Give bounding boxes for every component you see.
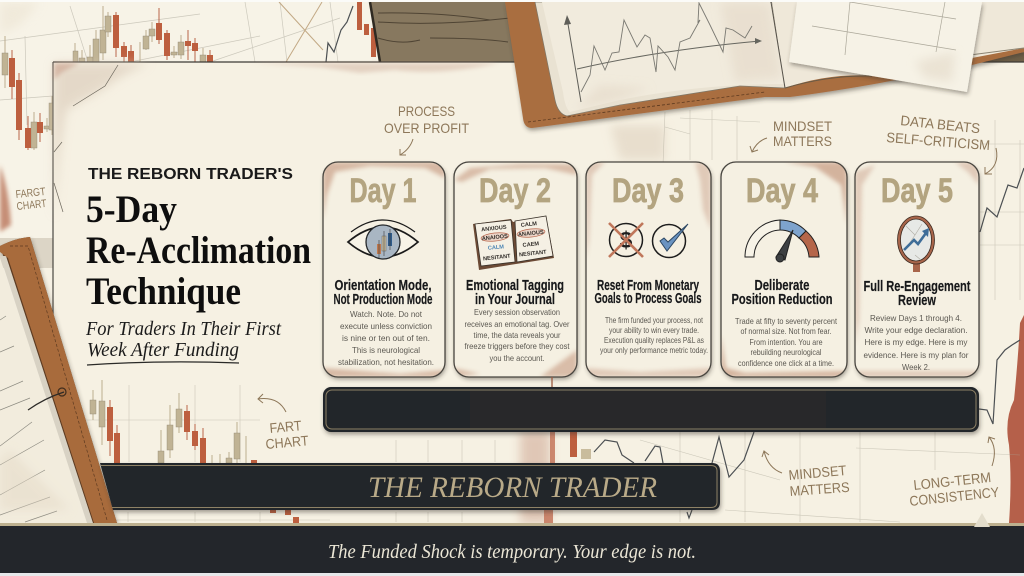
card: Day 3: your only performance metric today. bbox=[600, 345, 708, 355]
card: Day 3: Execution quality replaces P&L as bbox=[604, 335, 704, 345]
card: Day 5: Write your edge declaration. bbox=[864, 325, 968, 335]
icon: journal with emotional tags: CALM bbox=[521, 221, 538, 229]
line chart, lower centre bbox=[544, 431, 754, 523]
card: Day 5: evidence. Here is my plan for bbox=[864, 350, 969, 360]
card: Day 1: Not Production Mode bbox=[334, 292, 432, 308]
icon: crossed-out dollar and check mark bbox=[609, 223, 688, 258]
note: fargt chart: CHART bbox=[16, 198, 47, 213]
card: Day 1: Watch. Note. Do not bbox=[350, 309, 423, 319]
card: Day 1 bbox=[323, 162, 445, 377]
card: Day 3 bbox=[586, 162, 711, 377]
icon: eye with candlesticks bbox=[348, 220, 418, 259]
card: Day 3: The firm funded your process, not bbox=[605, 315, 703, 325]
card: Day 2: Day 2 bbox=[479, 172, 551, 210]
connector stem under Day 2 card bbox=[551, 377, 553, 387]
card: Day 1: execute unless conviction bbox=[340, 321, 432, 331]
empty leather bar bbox=[323, 387, 979, 432]
icon: journal with emotional tags: NESITANT bbox=[483, 254, 511, 262]
note: process over profit: PROCESS bbox=[398, 103, 455, 119]
open notebook, lower left bbox=[0, 237, 117, 523]
heading block bbox=[85, 166, 311, 365]
card: Day 1: Orientation Mode, bbox=[334, 278, 432, 294]
note: mindset matters, bottom: MATTERS bbox=[789, 479, 850, 499]
card: Day 4: Trade at fifty to seventy percent bbox=[735, 316, 838, 326]
card: Day 4: rebuilding neurological bbox=[750, 347, 822, 357]
note: mindset matters, bottom bbox=[762, 451, 850, 499]
wooden desk, top bbox=[370, 2, 516, 62]
heading block: For Traders In Their First bbox=[85, 318, 282, 340]
note: mindset matters, bottom: MINDSET bbox=[788, 462, 847, 483]
card: Day 2: Every session observation bbox=[474, 307, 560, 317]
card: Day 1: This is neurological bbox=[352, 345, 420, 355]
main parchment sheet bbox=[53, 62, 1024, 523]
note: fargt chart bbox=[15, 186, 47, 213]
card: Day 3: your ability to win every trade. bbox=[609, 325, 699, 335]
card: Day 2: receives an emotional tag. Over bbox=[464, 319, 570, 329]
note: mindset matters, top: MINDSET bbox=[773, 118, 832, 134]
card: Day 1: stabilization, not hesitation. bbox=[338, 357, 434, 367]
card: Day 1: is nine or ten out of ten. bbox=[342, 333, 430, 343]
footer band bbox=[0, 513, 1024, 576]
card: Day 4: confidence one click at a time. bbox=[738, 358, 834, 368]
card: Day 5: Review bbox=[898, 293, 937, 309]
card: Day 5: Review Days 1 through 4. bbox=[870, 313, 962, 323]
note: data beats self-criticism: SELF-CRITICISM bbox=[886, 129, 991, 153]
note: long-term consistency: CONSISTENCY bbox=[909, 484, 1000, 509]
card: Day 4 bbox=[721, 162, 847, 377]
heading block: Technique bbox=[86, 269, 241, 313]
icon: journal with emotional tags: ANAIOOS bbox=[482, 234, 508, 242]
card: Day 5: Full Re-Engagement bbox=[864, 279, 971, 295]
icon: journal with emotional tags: ANXIOUS bbox=[481, 225, 507, 233]
card: Day 4: Day 4 bbox=[746, 172, 818, 210]
card: Day 1: Day 1 bbox=[350, 172, 416, 210]
note: long-term consistency bbox=[909, 437, 1000, 509]
loose note sheet, top right bbox=[789, 2, 982, 92]
card: Day 3: Reset From Monetary bbox=[597, 278, 699, 294]
card: Day 3: Goals to Process Goals bbox=[594, 291, 702, 307]
title banner: THE REBORN TRADER bbox=[368, 472, 657, 504]
candlestick chart, top left bbox=[2, 2, 376, 150]
note: mindset matters, top bbox=[750, 118, 832, 152]
note: process over profit bbox=[384, 103, 469, 155]
note: data beats self-criticism bbox=[886, 112, 997, 174]
wooden desk, right bbox=[968, 52, 1024, 92]
card: Day 2: in Your Journal bbox=[475, 292, 555, 308]
note: process over profit: OVER PROFIT bbox=[384, 120, 469, 136]
heading block: Week After Funding bbox=[87, 339, 239, 361]
icon: journal with emotional tags: ANAIOUS bbox=[518, 230, 544, 238]
card: Day 2: Emotional Tagging bbox=[466, 278, 564, 294]
card: Day 5: Week 2. bbox=[902, 362, 930, 372]
card: Day 2: freeze triggers before they cost bbox=[464, 341, 570, 351]
card: Day 2: you the account. bbox=[490, 353, 544, 363]
background chart paper, top left bbox=[0, 2, 372, 268]
note: fart chart: CHART bbox=[265, 432, 309, 452]
heading block: THE REBORN TRADER'S bbox=[88, 166, 293, 183]
line chart, right margin bbox=[979, 168, 1024, 424]
card: Day 2: time, the data reveals your bbox=[474, 330, 561, 340]
note: long-term consistency: LONG-TERM bbox=[913, 469, 992, 493]
icon: position size gauge bbox=[745, 220, 819, 262]
icon: journal with emotional tags: CALM bbox=[488, 244, 505, 252]
title banner bbox=[100, 463, 720, 510]
card: Day 3: Day 3 bbox=[612, 172, 684, 210]
icon: journal with emotional tags: NESITANT bbox=[519, 250, 547, 258]
card: Day 4: From intention. You are bbox=[750, 337, 823, 347]
heading block: Re-Acclimation bbox=[86, 228, 311, 272]
card: Day 5: Day 5 bbox=[881, 172, 953, 210]
card: Day 2 bbox=[454, 162, 577, 377]
icon: journal with emotional tags: CAEM bbox=[522, 241, 540, 249]
grid lines on parchment bbox=[75, 110, 1024, 522]
note: fart chart bbox=[258, 394, 309, 452]
open journal, top bbox=[505, 2, 1024, 128]
top edge highlight bbox=[0, 0, 1024, 2]
icon: crossed-out dollar and check mark: $ bbox=[620, 227, 633, 253]
card: Day 4: Deliberate bbox=[754, 278, 810, 294]
card: Day 4: of normal size. Not from fear. bbox=[740, 326, 832, 336]
journal sketch chart bbox=[564, 3, 762, 102]
heading block: 5-Day bbox=[86, 187, 177, 231]
footer band: The Funded Shock is temporary. Your edge is not. bbox=[328, 541, 696, 563]
note: fart chart: FART bbox=[269, 417, 303, 436]
card: Day 5 bbox=[855, 162, 979, 377]
icon: mirror with rising arrow bbox=[898, 216, 934, 272]
card: Day 4: Position Reduction bbox=[732, 292, 832, 308]
note: data beats self-criticism: DATA BEATS bbox=[900, 112, 981, 136]
candlestick chart, lower left bbox=[90, 380, 299, 523]
card: Day 5: Here is my edge. Here is my bbox=[864, 337, 968, 347]
icon: journal with emotional tags bbox=[473, 216, 554, 270]
note: fargt chart: FARGT bbox=[15, 186, 46, 201]
note: mindset matters, top: MATTERS bbox=[773, 133, 832, 149]
